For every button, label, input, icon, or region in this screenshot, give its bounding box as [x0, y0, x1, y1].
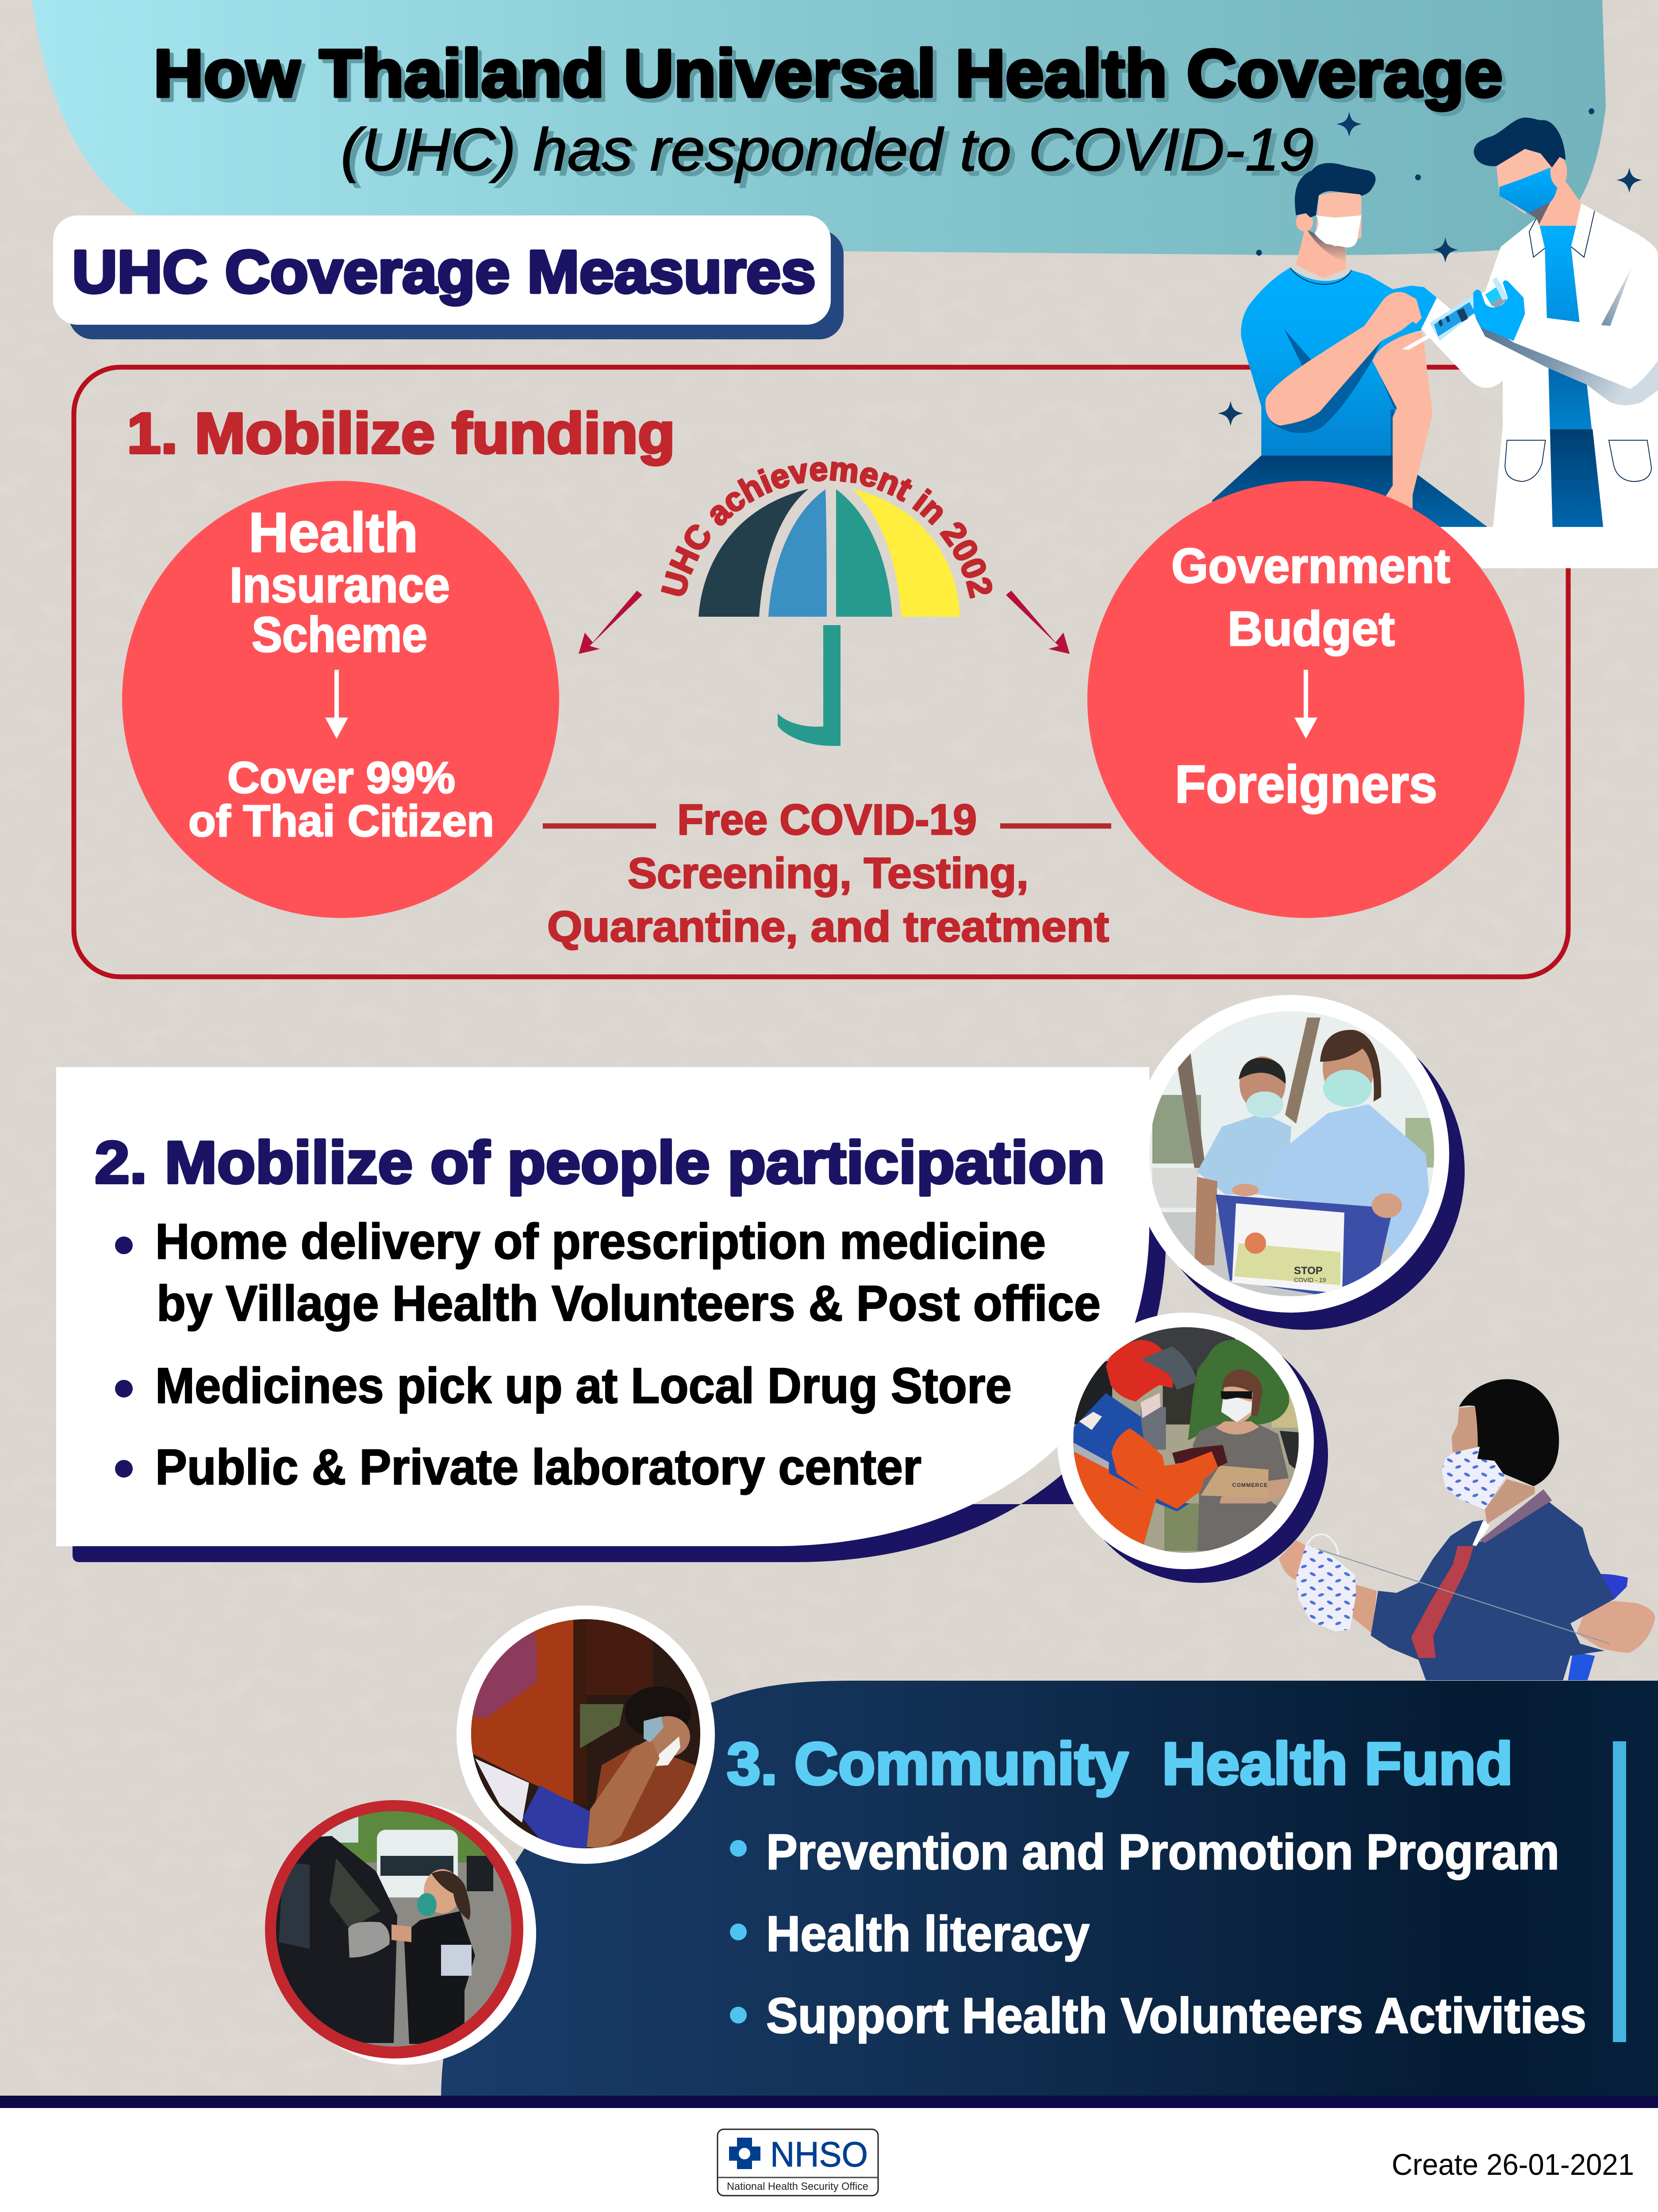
illustration: doctor vaccinating patient — [1212, 108, 1658, 568]
circle: Health Insurance Scheme: Scheme — [252, 607, 427, 662]
photo: volunteers with delivery box: COVID - 19 — [1294, 1276, 1326, 1283]
circle: Government Budget: Budget — [1228, 602, 1395, 656]
text block: free COVID-19 services: Free COVID-19 — [677, 795, 977, 844]
arrow: budget to foreigners — [1294, 670, 1317, 739]
creation date: Create 26-01-2021 — [1392, 2148, 1634, 2181]
bullet list: people participation: by Village Health Volunteers & Post office — [157, 1275, 1101, 1331]
text block: free COVID-19 services — [543, 795, 1111, 951]
bottom band — [0, 2096, 1658, 2108]
circle: Health Insurance Scheme: Insurance — [230, 557, 450, 613]
bullet list: community health fund: Support Health Volunteers Activities — [766, 1988, 1586, 2043]
photo: postal delivery rider: COMMERCE — [1232, 1482, 1268, 1488]
header band — [32, 0, 1606, 255]
bullet list: community health fund: Health literacy — [766, 1906, 1090, 1962]
circle: Government Budget: Foreigners — [1175, 755, 1437, 814]
doctor — [1421, 118, 1658, 568]
title — [154, 36, 1503, 183]
arrow: scheme to coverage — [325, 670, 348, 739]
panel: mobilize people participation — [56, 1067, 1166, 1562]
circle: Government Budget — [1087, 481, 1524, 918]
heading: 2. Mobilize of people participation: 2. Mobilize of people participation — [95, 1129, 1105, 1196]
arrow: umbrella to government budget — [1006, 591, 1070, 654]
curved text: UHC achievement in 2002: UHC achievement in 2002 — [654, 449, 1000, 601]
patient — [1212, 163, 1487, 527]
logo: NHSO — [718, 2129, 878, 2196]
bullet list: community health fund: Prevention and Promotion Program — [766, 1824, 1559, 1880]
arrow: umbrella to health insurance — [579, 591, 642, 654]
illustration: woman stretching mask elastic — [1279, 1379, 1655, 1680]
logo: NHSO: National Health Security Office — [727, 2181, 868, 2193]
sparkles and dots — [1218, 108, 1642, 426]
circle: Health Insurance Scheme: Cover 99% — [227, 753, 455, 803]
heading: 1. Mobilize funding: 1. Mobilize funding — [127, 401, 675, 465]
photo: postal delivery rider — [1057, 1313, 1328, 1583]
panel: mobilize funding frame — [74, 367, 1568, 977]
bullet list: community health fund — [730, 1824, 1586, 2043]
section label: UHC Coverage Measures: UHC Coverage Measures — [72, 238, 816, 305]
circle: Health Insurance Scheme: Health — [249, 501, 418, 564]
bullet list: people participation: Home delivery of prescription medicine — [155, 1214, 1046, 1269]
bullet list: people participation — [115, 1214, 1101, 1495]
photo: volunteers with delivery box: STOP — [1294, 1265, 1323, 1277]
text block: free COVID-19 services: Quarantine, and treatment — [547, 902, 1109, 951]
icon: umbrella — [699, 489, 960, 746]
bullet list: people participation: Public & Private laboratory center — [155, 1439, 921, 1495]
circle: Health Insurance Scheme: of Thai Citizen — [188, 796, 494, 846]
photo: drive-through screening — [265, 1800, 536, 2065]
circle: Government Budget: Government — [1171, 539, 1450, 593]
photo: volunteers with delivery box — [1132, 995, 1465, 1330]
text block: free COVID-19 services: Screening, Testing, — [628, 849, 1029, 897]
title line 1: How Thailand Universal Health Coverage — [154, 36, 1503, 111]
panel: community health fund background — [441, 1681, 1658, 2096]
footer background — [0, 2108, 1658, 2212]
heading: 3. Community Health Fund: 3. Community Health Fund — [727, 1730, 1513, 1797]
syringe and glove — [1402, 277, 1525, 350]
logo: NHSO: NHSO — [770, 2135, 868, 2174]
accent bar — [1613, 1741, 1626, 2042]
photo: forehead temperature check — [457, 1605, 715, 1864]
title line 2: (UHC) has responded to COVID-19 — [341, 116, 1314, 183]
section label: UHC Coverage Measures — [53, 215, 844, 339]
circle: Health Insurance Scheme — [122, 481, 559, 918]
bullet list: people participation: Medicines pick up at Local Drug Store — [155, 1358, 1012, 1413]
